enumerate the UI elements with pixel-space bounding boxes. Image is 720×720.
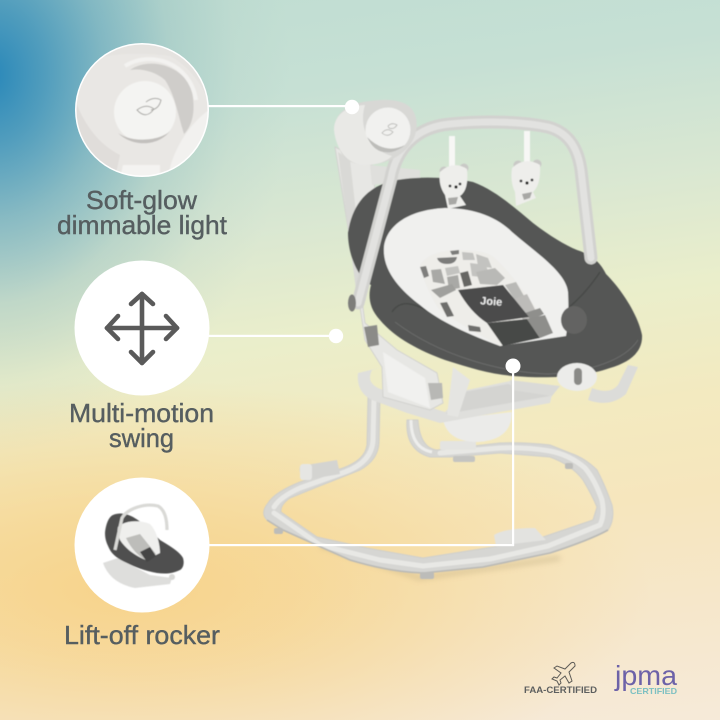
hanging bear left (440, 164, 468, 209)
heading: multi-motion swing (69, 398, 214, 453)
motor bowl (443, 412, 512, 442)
harness pad with logo (458, 285, 529, 323)
hinge (348, 294, 356, 312)
heading: soft-glow dimmable light: dimmable light (57, 210, 228, 240)
connector: motion (208, 329, 343, 343)
heading: soft-glow dimmable light (57, 185, 228, 240)
icon: four-way arrows (107, 294, 177, 363)
heading: lift-off rocker: Lift-off rocker (64, 620, 220, 650)
light close-up photo (75, 44, 212, 178)
rear seat leg (447, 367, 470, 417)
rocker thumbnail (103, 505, 184, 588)
heading: multi-motion swing: Multi-motion (69, 398, 214, 428)
patterned insert (420, 250, 553, 346)
toy strap left (449, 136, 455, 168)
badge: JPMA certified: jpma (614, 660, 677, 691)
upright support column (335, 147, 443, 410)
heading: soft-glow dimmable light: Soft-glow (86, 185, 197, 215)
base feet and wheel housing (300, 460, 340, 480)
badge: FAA certified (524, 662, 597, 695)
badge: FAA certified: FAA-CERTIFIED (524, 684, 597, 695)
swing base frame (264, 397, 613, 573)
toy arch (358, 122, 591, 303)
light housing (334, 100, 417, 165)
ground shadow (320, 545, 560, 578)
white seat pad (384, 208, 568, 346)
connector: light (208, 100, 359, 114)
heading: multi-motion swing: swing (109, 423, 174, 453)
icon: airplane (552, 662, 575, 685)
product: baby swing (264, 100, 642, 579)
seat shell (348, 178, 642, 377)
harness pad with logo: Joie (480, 295, 503, 309)
dark crotch strap (487, 319, 540, 346)
hanging bear right (511, 160, 542, 206)
panel: lift-off rocker (74, 478, 210, 612)
control knob (557, 363, 597, 391)
badge: JPMA certified: CERTIFIED (630, 686, 677, 696)
panel: soft-glow light (75, 43, 212, 178)
tray (358, 367, 552, 423)
toy strap right (524, 131, 530, 163)
right seat support (588, 365, 638, 403)
panel: multi-motion (74, 260, 210, 396)
connector: rocker (208, 358, 520, 546)
